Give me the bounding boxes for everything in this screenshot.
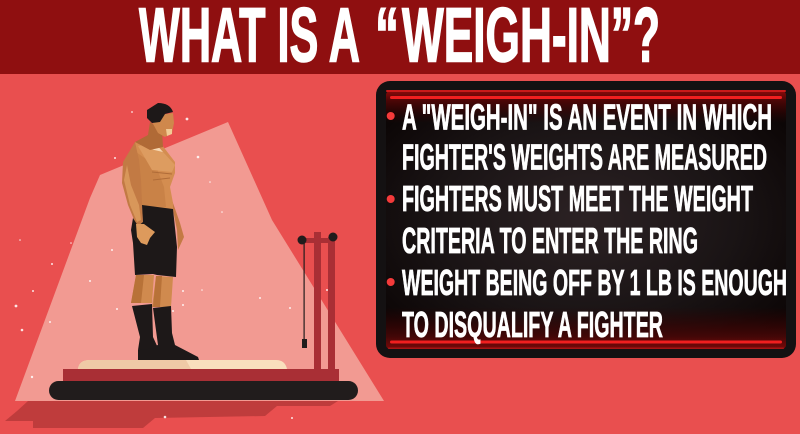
- far sock and boot: [138, 306, 199, 360]
- far leg: [152, 276, 173, 307]
- scale knobs: [298, 236, 306, 244]
- scale platform: [49, 381, 358, 400]
- fighter: [122, 103, 199, 360]
- neck: [135, 122, 163, 150]
- info panel: [376, 81, 796, 358]
- inner panel: [386, 91, 786, 349]
- near arm: [122, 142, 153, 245]
- scale base: [63, 369, 339, 381]
- scale: [49, 232, 358, 400]
- bullet text: [402, 96, 787, 345]
- hair: [147, 103, 173, 123]
- near sock: [132, 304, 158, 350]
- top glow bar: [386, 90, 786, 99]
- spotlight: [15, 122, 384, 401]
- platform shadow: [5, 401, 338, 428]
- scale columns: [314, 232, 321, 369]
- shorts: [131, 205, 177, 277]
- bottom glow bar: [388, 340, 784, 349]
- scale top pad: [78, 360, 287, 369]
- chest highlight: [138, 143, 175, 172]
- torso shading: [132, 152, 166, 207]
- title banner: [0, 0, 800, 78]
- scale cord and weight: [304, 243, 305, 340]
- torso: [132, 137, 175, 210]
- stars: [15, 111, 328, 419]
- face: [152, 113, 174, 137]
- hand over shorts: [136, 224, 155, 245]
- abs lines: [152, 172, 172, 180]
- bullets: [387, 112, 395, 286]
- near leg: [131, 275, 154, 303]
- far arm: [170, 195, 184, 250]
